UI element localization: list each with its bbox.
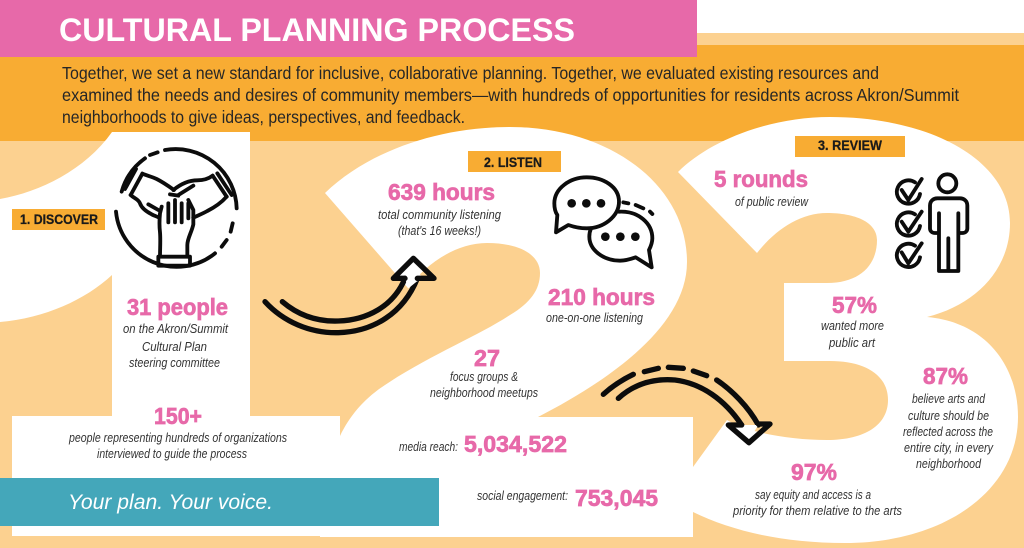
stat: 150+: 150+	[154, 403, 202, 429]
stat: 87%: neighborhood	[916, 457, 982, 471]
stat: 31 people: steering committee	[129, 356, 220, 370]
stat: 210 hours	[546, 284, 655, 325]
big numeral 1	[0, 132, 340, 536]
icon: speech bubbles	[554, 177, 652, 267]
stat: 97%: 97%	[791, 459, 837, 485]
stat: 27 focus groups	[430, 345, 538, 400]
intro text	[62, 63, 959, 127]
stat: 97%	[732, 459, 902, 518]
icon: three joined hands	[116, 149, 237, 267]
intro text: examined the needs and desires of community members—with hundreds of opportunities for residents across Akron/Summit	[62, 85, 959, 105]
label: 3. review	[795, 136, 905, 157]
stat: 87%: entire city, in every	[904, 441, 994, 455]
stat: 87%: 87%	[923, 363, 968, 389]
stat: 27 focus groups: 27	[474, 345, 500, 371]
stat: 31 people: Cultural Plan	[142, 340, 207, 354]
stat: media reach	[399, 431, 567, 457]
stat: 27 focus groups: focus groups &	[450, 370, 518, 384]
stat: 31 people	[123, 294, 228, 370]
stat: 210 hours: one-on-one listening	[546, 311, 643, 325]
stat: social engagement	[477, 485, 658, 511]
stat: 31 people: 31 people	[127, 294, 228, 320]
big numeral 3	[678, 117, 1018, 543]
stat: 210 hours: 210 hours	[548, 284, 655, 310]
label: 1. discover: 1. DISCOVER	[20, 212, 98, 227]
stat: 150+: interviewed to guide the process	[97, 447, 247, 461]
stat: 87%: culture should be	[908, 409, 989, 423]
label: 2. listen	[468, 151, 561, 172]
icon: person with checklist	[897, 174, 967, 271]
stat: 5 rounds	[714, 166, 809, 209]
intro text: neighborhoods to give ideas, perspectives, and feedback.	[62, 107, 465, 127]
stat: 97%: priority for them relative to the arts	[732, 504, 902, 518]
stat: 639 hours: total community listening	[378, 208, 501, 222]
label: 1. discover	[12, 209, 105, 230]
stat: 57%	[821, 292, 884, 350]
stat: 31 people: on the Akron/Summit	[123, 322, 228, 336]
label: 2. listen: 2. LISTEN	[484, 155, 542, 170]
big numeral 2	[320, 127, 693, 537]
orange intro band	[0, 45, 1024, 141]
stat: 150+	[68, 403, 287, 461]
stat: social engagement: social engagement:	[477, 489, 568, 503]
stat: 57%: public art	[828, 336, 875, 350]
arrow: listen to review	[603, 367, 770, 443]
title banner	[0, 0, 697, 57]
stat: 97%: say equity and access is a	[755, 488, 871, 502]
stat: 5 rounds: of public review	[735, 195, 809, 209]
stat: 150+: people representing hundreds of organizations	[68, 431, 287, 445]
stat: 57%: wanted more	[821, 319, 884, 333]
stat: 57%: 57%	[832, 292, 877, 318]
teal tagline banner	[0, 478, 439, 526]
stat: social engagement: 753,045	[575, 485, 658, 511]
stat: 5 rounds: 5 rounds	[714, 166, 808, 192]
stat: media reach: 5,034,522	[464, 431, 567, 457]
stat: 87%: believe arts and	[912, 392, 986, 406]
arrow: discover to listen	[265, 258, 434, 333]
label: 3. review: 3. REVIEW	[818, 138, 882, 153]
stat: 639 hours	[378, 179, 501, 238]
stat: 639 hours: (that's 16 weeks!)	[398, 224, 481, 238]
teal tagline banner: Your plan. Your voice.	[68, 491, 273, 514]
intro text: Together, we set a new standard for inclusive, collaborative planning. Together, we evaluated existing resources and	[62, 63, 879, 83]
stat: 639 hours: 639 hours	[388, 179, 495, 205]
stat: 87%: reflected across the	[903, 425, 993, 439]
stat: 87%	[903, 363, 994, 471]
stat: media reach: media reach:	[399, 440, 458, 454]
stat: 27 focus groups: neighborhood meetups	[430, 386, 538, 400]
title banner: CULTURAL PLANNING PROCESS	[59, 12, 575, 48]
